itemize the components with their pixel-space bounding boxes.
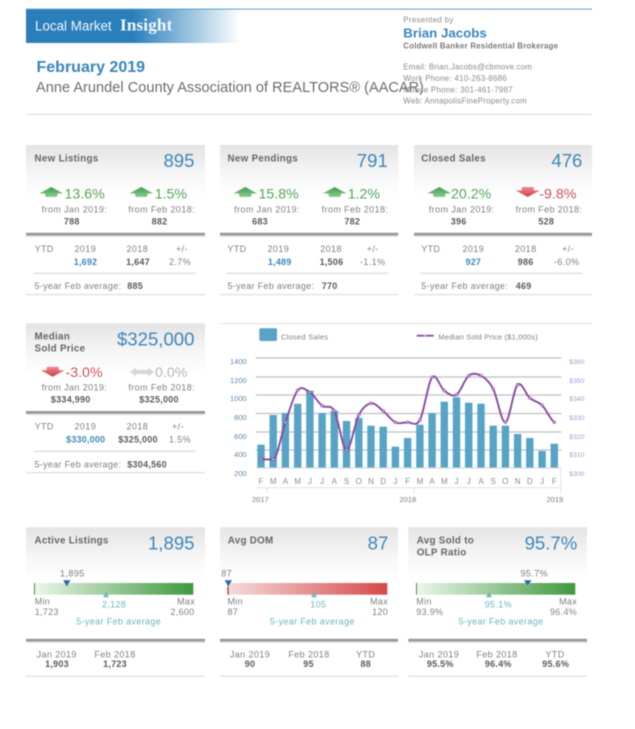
comparison row: 95.6% bbox=[542, 659, 569, 669]
year to date row: YTD bbox=[35, 244, 54, 254]
month labels: M bbox=[441, 477, 448, 486]
line: median sold price bbox=[260, 374, 556, 461]
year to date row: YTD bbox=[228, 244, 247, 254]
change from Jan 2019: 396 bbox=[451, 217, 467, 227]
change from Jan 2019 bbox=[233, 187, 300, 227]
month labels: J bbox=[540, 477, 544, 486]
range gauge: 5-year Feb average bbox=[76, 616, 161, 626]
month labels: F bbox=[259, 477, 264, 486]
month labels: M bbox=[417, 477, 424, 486]
range gauge: Max bbox=[177, 596, 195, 606]
year to date row bbox=[228, 244, 385, 267]
month labels: A bbox=[478, 477, 484, 486]
presenter contact block: Presented by bbox=[403, 16, 453, 25]
year to date row: 1,489 bbox=[268, 257, 291, 267]
range gauge: 2,600 bbox=[170, 607, 194, 617]
presenter contact block bbox=[403, 16, 559, 106]
year to date row: 2018 bbox=[126, 422, 148, 432]
change from Feb 2018: $325,000 bbox=[139, 395, 179, 405]
left axis labels bbox=[230, 357, 247, 478]
comparison row: YTD bbox=[356, 649, 375, 659]
presenter contact block: Work Phone: 410-263-8686 bbox=[403, 74, 507, 83]
presenter contact block: Brian Jacobs bbox=[403, 26, 487, 41]
month labels: D bbox=[527, 477, 533, 486]
month labels: O bbox=[502, 477, 509, 486]
change from Jan 2019: $334,990 bbox=[51, 395, 90, 405]
range gauge bbox=[221, 569, 388, 626]
year to date row: +/- bbox=[172, 422, 184, 432]
change from Feb 2018: -9.8% bbox=[539, 187, 577, 203]
month labels: A bbox=[283, 477, 289, 486]
five-year average: $304,560 bbox=[127, 459, 167, 469]
panel: Active Listings: Active Listings bbox=[34, 535, 109, 546]
gridlines bbox=[256, 358, 561, 468]
comparison row: 90 bbox=[245, 659, 255, 669]
comparison row: Jan 2019 bbox=[419, 649, 459, 659]
year labels: 2019 bbox=[546, 495, 563, 504]
comparison row bbox=[230, 649, 375, 669]
header band: Local Market Insight: Insight bbox=[120, 16, 173, 35]
panel: Median Sold Price: Median bbox=[34, 331, 70, 342]
range gauge: 87 bbox=[221, 569, 232, 579]
year labels: 2017 bbox=[252, 495, 269, 504]
left axis labels: 1000 bbox=[230, 394, 247, 403]
header band: Local Market Insight bbox=[26, 10, 240, 43]
range gauge: 1,723 bbox=[35, 607, 59, 617]
year to date row: $330,000 bbox=[66, 435, 105, 445]
comparison row bbox=[37, 649, 136, 669]
panel: Avg Sold to OLP Ratio bbox=[408, 527, 587, 677]
panel: Avg Sold to OLP Ratio: Avg Sold to bbox=[417, 535, 474, 546]
year to date row: 1,506 bbox=[320, 257, 343, 267]
range gauge: Min bbox=[228, 596, 243, 606]
comparison row: Feb 2018 bbox=[94, 649, 136, 659]
right axis labels: $300 bbox=[569, 471, 585, 478]
year to date row: 927 bbox=[465, 257, 481, 267]
change from Jan 2019: -3.0% bbox=[66, 365, 103, 381]
comparison row: 95 bbox=[303, 659, 314, 669]
comparison row: Jan 2019 bbox=[230, 649, 270, 659]
range gauge: Max bbox=[370, 596, 388, 606]
panel: Avg DOM bbox=[220, 527, 398, 677]
time axis bbox=[256, 468, 561, 493]
year to date row: -1.1% bbox=[360, 257, 385, 267]
range gauge: 93.9% bbox=[416, 607, 443, 617]
right axis labels: $350 bbox=[569, 378, 585, 385]
comparison row: 96.4% bbox=[485, 659, 512, 669]
year labels: 2018 bbox=[400, 495, 416, 504]
right axis labels bbox=[569, 359, 585, 478]
range gauge: 95.1% bbox=[485, 600, 512, 610]
panel: Closed Sales bbox=[414, 145, 592, 295]
year to date row: 1,692 bbox=[74, 257, 97, 267]
range gauge: 105 bbox=[310, 600, 326, 610]
panel: Avg Sold to OLP Ratio: 95.7% bbox=[525, 532, 577, 553]
change from Feb 2018 bbox=[516, 187, 582, 227]
panel: New Listings: New Listings bbox=[34, 154, 99, 165]
panel: Avg DOM: 87 bbox=[368, 532, 388, 553]
presenter contact block: Email: Brian.Jacobs@cbmove.com bbox=[403, 63, 532, 72]
month labels: J bbox=[320, 477, 324, 486]
year to date row: 2018 bbox=[126, 244, 148, 254]
presenter contact block: Web: AnnapolisFineProperty.com bbox=[403, 97, 527, 106]
range gauge: 87 bbox=[228, 607, 238, 617]
right axis labels: $330 bbox=[569, 415, 585, 422]
change from Feb 2018: 882 bbox=[152, 217, 167, 227]
change from Feb 2018: from Feb 2018: bbox=[322, 205, 388, 215]
year to date row: 2019 bbox=[267, 244, 289, 254]
panel: New Listings bbox=[26, 145, 205, 295]
month labels: J bbox=[454, 477, 458, 486]
change from Jan 2019: 683 bbox=[252, 217, 268, 227]
year labels bbox=[252, 495, 563, 504]
comparison row: 1,723 bbox=[103, 659, 127, 669]
panel: New Pendings: New Pendings bbox=[228, 154, 298, 165]
change from Feb 2018: from Feb 2018: bbox=[516, 205, 582, 215]
month labels: M bbox=[270, 477, 277, 486]
year to date row: +/- bbox=[562, 244, 574, 254]
change from Jan 2019: 20.2% bbox=[451, 187, 492, 203]
presenter contact block: Mobile Phone: 301-461-7987 bbox=[403, 85, 513, 94]
range gauge bbox=[416, 569, 577, 626]
right axis labels: $320 bbox=[569, 434, 585, 441]
change from Feb 2018 bbox=[128, 365, 195, 405]
panel: Active Listings bbox=[26, 527, 205, 677]
report title bbox=[36, 59, 424, 96]
five-year average: 885 bbox=[127, 281, 143, 291]
report title: Anne Arundel County Association of REALTORS® (AACAR) bbox=[36, 80, 424, 96]
comparison row: Jan 2019 bbox=[37, 649, 77, 659]
right axis labels: $360 bbox=[569, 359, 585, 366]
change from Jan 2019: from Jan 2019: bbox=[234, 205, 300, 215]
comparison row: Feb 2018 bbox=[288, 649, 330, 659]
month labels: J bbox=[467, 477, 471, 486]
year to date row: 2019 bbox=[74, 244, 96, 254]
panel: Active Listings: 1,895 bbox=[148, 532, 194, 553]
year to date row: $325,000 bbox=[118, 435, 158, 445]
right axis labels: $310 bbox=[569, 452, 585, 459]
change from Jan 2019: 788 bbox=[64, 217, 80, 227]
year to date row: 2019 bbox=[74, 422, 96, 432]
change from Feb 2018: 0.0% bbox=[155, 365, 188, 381]
comparison row: Feb 2018 bbox=[476, 649, 518, 659]
year to date row: 2.7% bbox=[169, 257, 191, 267]
month labels: J bbox=[308, 477, 312, 486]
year to date row bbox=[35, 422, 191, 445]
change from Jan 2019: 13.6% bbox=[64, 187, 105, 203]
five-year average: 770 bbox=[322, 281, 337, 291]
comparison row bbox=[419, 649, 569, 669]
range gauge: Min bbox=[35, 596, 50, 606]
panel: Median Sold Price: Sold Price bbox=[34, 343, 86, 354]
year to date row: -6.0% bbox=[554, 257, 579, 267]
change from Feb 2018 bbox=[322, 187, 388, 227]
change from Jan 2019: from Jan 2019: bbox=[42, 382, 107, 392]
year to date row bbox=[421, 244, 579, 267]
report title: February 2019 bbox=[36, 59, 145, 76]
range gauge: Min bbox=[416, 596, 432, 606]
year to date row: 1,647 bbox=[126, 257, 150, 267]
change from Jan 2019: from Jan 2019: bbox=[429, 205, 495, 215]
comparison row: YTD bbox=[545, 649, 565, 659]
range gauge: 95.7% bbox=[521, 569, 548, 579]
month labels: O bbox=[356, 477, 362, 486]
range gauge: 120 bbox=[372, 607, 388, 617]
five-year average: 5-year Feb average: bbox=[34, 281, 121, 291]
presenter contact block: Coldwell Banker Residential Brokerage bbox=[403, 42, 559, 51]
month labels: N bbox=[515, 477, 521, 486]
panel: New Listings: 895 bbox=[163, 150, 194, 171]
range gauge: Max bbox=[559, 596, 577, 606]
left axis labels: 600 bbox=[234, 432, 247, 441]
left axis labels: 1200 bbox=[230, 376, 247, 385]
change from Feb 2018: 782 bbox=[344, 217, 360, 227]
month labels: A bbox=[332, 477, 338, 486]
year to date row: 986 bbox=[518, 257, 534, 267]
year to date row: 2018 bbox=[320, 244, 342, 254]
legend: closed sales: Closed Sales bbox=[281, 332, 328, 341]
left axis labels: 200 bbox=[234, 469, 247, 478]
five-year average: 469 bbox=[516, 281, 531, 291]
change from Feb 2018: 1.2% bbox=[348, 187, 380, 203]
panel: Closed Sales: 476 bbox=[551, 150, 582, 171]
header band: Local Market Insight: Local Market bbox=[35, 19, 112, 34]
comparison row: 1,903 bbox=[45, 659, 69, 669]
year to date row: YTD bbox=[421, 244, 440, 254]
comparison row: 95.5% bbox=[427, 659, 454, 669]
panel: New Pendings bbox=[220, 145, 398, 295]
panel: Avg Sold to OLP Ratio: OLP Ratio bbox=[417, 547, 467, 558]
month labels: D bbox=[380, 477, 386, 486]
month labels: J bbox=[393, 477, 397, 486]
year to date row bbox=[35, 244, 191, 267]
range gauge: 5-year Feb average bbox=[459, 616, 543, 626]
range gauge: 5-year Feb average bbox=[270, 616, 355, 626]
month labels: F bbox=[405, 477, 410, 486]
chart: closed sales and median sold price bbox=[220, 323, 592, 504]
panel: New Pendings: 791 bbox=[357, 150, 388, 171]
comparison row: 88 bbox=[360, 659, 371, 669]
year to date row: 2018 bbox=[515, 244, 537, 254]
year to date row: 2019 bbox=[462, 244, 484, 254]
month labels: A bbox=[429, 477, 435, 486]
range gauge bbox=[34, 569, 195, 626]
five-year average: 5-year Feb average: bbox=[421, 281, 508, 291]
change from Feb 2018: 1.5% bbox=[155, 187, 187, 203]
month labels: N bbox=[368, 477, 374, 486]
change from Jan 2019 bbox=[41, 365, 107, 405]
left axis labels: 1400 bbox=[230, 357, 247, 366]
right axis labels: $340 bbox=[569, 396, 585, 403]
change from Feb 2018: from Feb 2018: bbox=[128, 205, 195, 215]
left axis labels: 400 bbox=[234, 450, 247, 459]
year to date row: +/- bbox=[176, 244, 188, 254]
year to date row: 1.5% bbox=[169, 435, 191, 445]
five-year average bbox=[34, 459, 167, 469]
month labels: S bbox=[491, 477, 496, 486]
change from Feb 2018: 528 bbox=[538, 217, 554, 227]
month labels: S bbox=[344, 477, 349, 486]
month labels: M bbox=[294, 477, 301, 486]
range gauge: 2,128 bbox=[102, 600, 126, 610]
panel: Median Sold Price bbox=[26, 323, 205, 473]
bars: closed sales bbox=[257, 391, 558, 468]
change from Jan 2019 bbox=[39, 187, 107, 227]
range gauge: 96.4% bbox=[550, 607, 577, 617]
legend: median sold price: Median Sold Price ($1,000s) bbox=[438, 332, 538, 341]
year to date row: +/- bbox=[367, 244, 379, 254]
five-year average: 5-year Feb average: bbox=[34, 459, 121, 469]
panel: Median Sold Price: $325,000 bbox=[117, 329, 194, 350]
change from Feb 2018 bbox=[128, 187, 195, 227]
panel: Closed Sales: Closed Sales bbox=[421, 154, 486, 165]
month labels bbox=[259, 477, 557, 486]
panel: Avg DOM: Avg DOM bbox=[228, 535, 274, 546]
change from Jan 2019: 15.8% bbox=[258, 187, 299, 203]
month labels: F bbox=[552, 477, 557, 486]
five-year average: 5-year Feb average: bbox=[228, 281, 314, 291]
left axis labels: 800 bbox=[234, 413, 247, 422]
year to date row: YTD bbox=[35, 422, 54, 432]
change from Feb 2018: from Feb 2018: bbox=[128, 382, 195, 392]
change from Jan 2019 bbox=[427, 187, 495, 227]
range gauge: 1,895 bbox=[60, 569, 85, 579]
change from Jan 2019: from Jan 2019: bbox=[42, 205, 107, 215]
legend: closed sales bbox=[259, 328, 328, 341]
